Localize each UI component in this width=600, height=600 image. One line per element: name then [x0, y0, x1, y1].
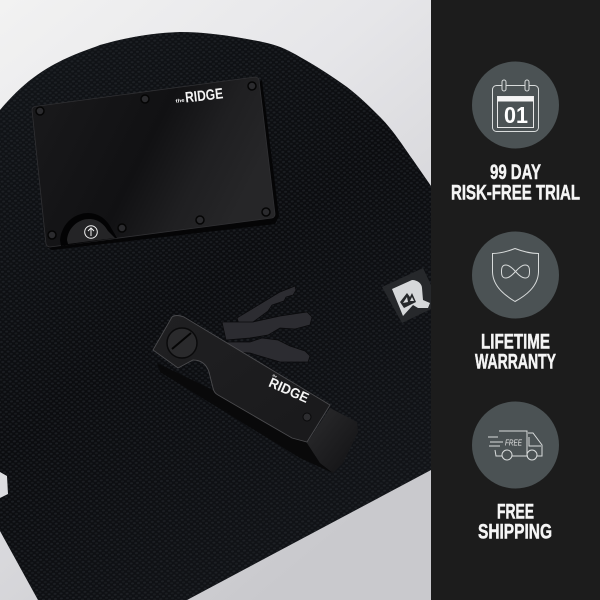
wallet logo [174, 85, 224, 108]
heading: 99 day risk-free trial: 99 DAY [490, 161, 541, 184]
badge: lifetime warranty [472, 232, 559, 374]
heading: lifetime warranty: LIFETIME [481, 330, 550, 354]
keys [222, 286, 312, 362]
pivot screw [167, 328, 197, 358]
product: key organizer [153, 286, 358, 473]
main body [153, 316, 330, 442]
product: card wallet [32, 77, 279, 250]
heading: 99 day risk-free trial [451, 161, 580, 204]
right dark panel [431, 0, 600, 600]
organizer logo: RIDGE [267, 374, 311, 406]
wallet logo: the [175, 98, 185, 105]
badge: free shipping [472, 402, 559, 544]
heading: lifetime warranty: WARRANTY [475, 350, 556, 374]
heading: lifetime warranty [475, 330, 556, 374]
background surface [0, 0, 431, 600]
end clip [307, 408, 358, 473]
beanie woven logo tag [382, 268, 431, 323]
badge: 99 day risk-free trial [451, 62, 580, 204]
wallet up-arrow badge [85, 226, 97, 238]
icon: calendar: 01 [504, 102, 528, 128]
lower plate [157, 363, 333, 473]
wallet screws [36, 82, 270, 239]
wallet money-clip notch [60, 213, 117, 246]
photo: black beanie [0, 20, 431, 600]
wallet logo: RIDGE [184, 85, 224, 107]
icon: calendar [472, 62, 559, 148]
heading: free shipping: FREE [497, 500, 534, 524]
icon: delivery truck [472, 402, 559, 488]
small rivet [303, 413, 311, 421]
icon: delivery truck: FREE [505, 438, 522, 448]
organizer logo: the [272, 373, 278, 379]
icon: shield with infinity [472, 232, 559, 318]
heading: free shipping: SHIPPING [478, 520, 552, 544]
heading: free shipping [478, 500, 552, 544]
